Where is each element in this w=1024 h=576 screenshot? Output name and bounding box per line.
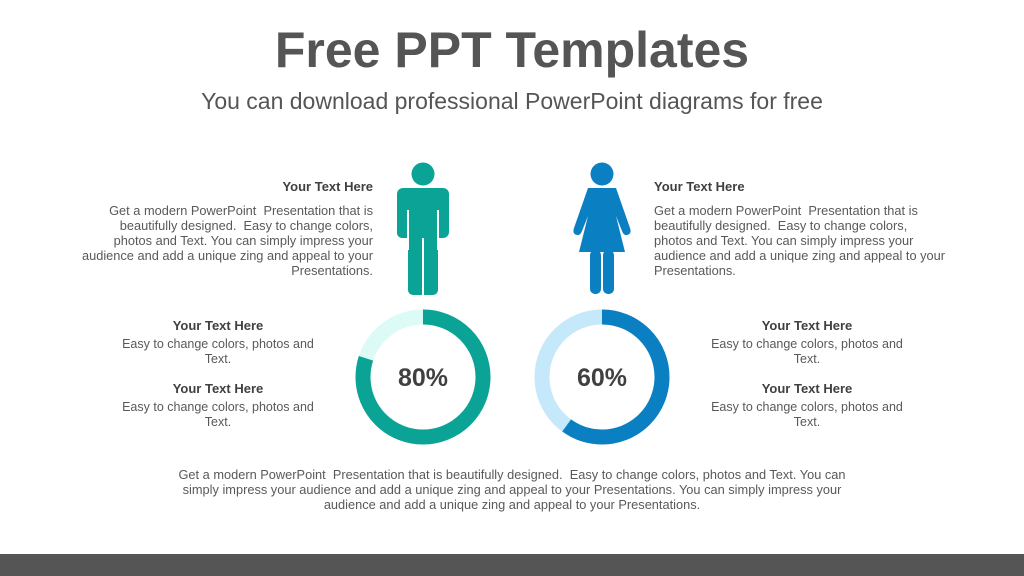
text block: top right: audience and add a unique zing and appeal to your	[654, 248, 945, 263]
text block: left 2	[122, 381, 314, 429]
text block: right 1: Your Text Here	[762, 318, 852, 333]
text block: right 2: Easy to change colors, photos and Text.	[711, 400, 903, 429]
label 60%: 60%	[577, 364, 627, 392]
text block: top left: Get a modern PowerPoint Presentation that is	[109, 203, 373, 218]
text block: top left: Presentations.	[291, 263, 373, 278]
text block: top left: audience and add a unique zing and appeal to your	[82, 248, 373, 263]
text block: top right	[654, 179, 945, 278]
donut 80%	[363, 317, 483, 437]
subtitle: You can download professional PowerPoint diagrams for free	[201, 88, 823, 114]
icon: woman	[573, 162, 631, 294]
donut 60%	[542, 317, 662, 437]
label 80%: 80%	[398, 364, 448, 392]
bottom text: Get a modern PowerPoint Presentation that is beautifully designed. Easy to change colors, photos and Text. You can	[178, 467, 846, 482]
text block: left 1	[122, 318, 314, 366]
text block: right 1	[711, 318, 903, 366]
icon: man	[397, 162, 449, 295]
text block: top left: beautifully designed. Easy to change colors,	[120, 218, 373, 233]
footer bar	[0, 554, 1024, 576]
text block: top right: photos and Text. You can simply impress your	[654, 233, 913, 248]
bottom text	[178, 467, 846, 512]
text block: top right: Get a modern PowerPoint Presentation that is	[654, 203, 918, 218]
text block: top right: Your Text Here	[654, 179, 745, 194]
text block: left 2: Your Text Here	[173, 381, 263, 396]
bottom text: simply impress your audience and add a unique zing and appeal to your Presentations. You can simply impress your	[183, 482, 841, 497]
text block: top left: Your Text Here	[282, 179, 373, 194]
text block: right 2: Your Text Here	[762, 381, 852, 396]
text block: left 2: Easy to change colors, photos and Text.	[122, 400, 314, 429]
text block: left 1: Easy to change colors, photos and Text.	[122, 337, 314, 366]
text block: right 2	[711, 381, 903, 429]
bottom text: audience and add a unique zing and appeal to your Presentations.	[324, 497, 700, 512]
text block: left 1: Your Text Here	[173, 318, 263, 333]
text block: top left	[82, 179, 373, 278]
text block: right 1: Easy to change colors, photos and Text.	[711, 337, 903, 366]
text block: top right: Presentations.	[654, 263, 736, 278]
text block: top left: photos and Text. You can simply impress your	[114, 233, 373, 248]
text block: top right: beautifully designed. Easy to change colors,	[654, 218, 907, 233]
title: Free PPT Templates	[275, 22, 749, 78]
